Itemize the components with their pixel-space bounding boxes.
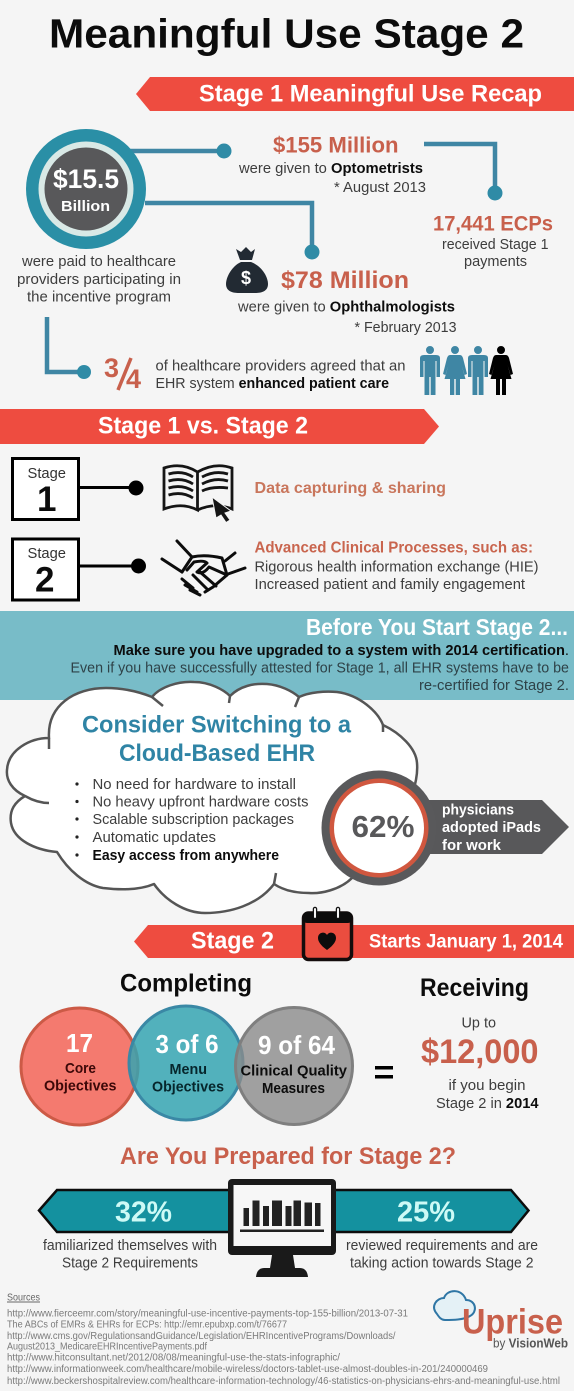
- sources: http://www.fierceemr.com/story/meaningful-use-incentive-payments-top-155-billion/2013-07-31: [7, 1308, 408, 1320]
- stat: three quarters: 4: [126, 364, 141, 394]
- ribbon: 25%: [397, 1196, 455, 1228]
- stat: $78 million ophthalmologists: were given to Ophthalmologists: [237, 300, 455, 316]
- heading: receiving: Receiving: [420, 974, 529, 1002]
- text: familiarized: familiarized themselves with: [43, 1238, 217, 1254]
- icon: handshake: [162, 541, 245, 595]
- text: advanced clinical processes: [254, 540, 538, 593]
- text: familiarized: Stage 2 Requirements: [62, 1256, 198, 1272]
- text: reviewed: reviewed requirements and are: [346, 1238, 538, 1254]
- logo: uprise by visionweb: Uprise: [462, 1302, 563, 1342]
- circle: 17 core objectives: Core: [65, 1060, 96, 1077]
- stat: three quarters: [104, 353, 141, 394]
- banner: stage 1 vs stage 2: Stage 1 vs. Stage 2: [98, 412, 308, 440]
- cloud bullet list: No heavy upfront hardware costs: [92, 794, 308, 810]
- cloud bullet list: [75, 777, 309, 864]
- stat: $155 million optometrists: were given to Optometrists: [238, 161, 423, 177]
- stat: 17,441 ECPs: payments: [464, 254, 527, 270]
- sources: [7, 1292, 560, 1387]
- title: Meaningful Use Stage 2: [49, 10, 524, 56]
- sources: The ABCs of EMRs & EHRs for ECPs: http://emr.epubxp.com/t/76677: [7, 1320, 287, 1330]
- receiving amount: Up to: [462, 1016, 496, 1032]
- text: advanced clinical processes: Increased patient and family engagement: [254, 577, 525, 593]
- text: reviewed: taking action towards Stage 2: [350, 1256, 534, 1272]
- circle: 3 of 6 menu objectives: Objectives: [152, 1078, 224, 1096]
- panel: before you start: Even if you have successfully attested for Stage 1, all EHR systems have to be: [70, 660, 569, 676]
- banner: stage 2 starts: [134, 925, 574, 958]
- sources: http://www.hitconsultant.net/2012/08/08/meaningful-use-the-stats-infographic/: [7, 1352, 340, 1364]
- receiving amount: if you begin: [448, 1078, 526, 1094]
- stat: $155 million optometrists: $155 Million: [273, 132, 398, 158]
- text: providers agreed: EHR system enhanced patient care: [156, 376, 389, 392]
- icon: people: [420, 346, 513, 395]
- sources: http://www.informationweek.com/healthcare/mobile-wireless/doctors-tablet-use-almost-doubles-in-201/240000469: [7, 1364, 488, 1375]
- circle: 3 of 6 menu objectives: [129, 1006, 243, 1120]
- sources: http://www.cms.gov/RegulationsandGuidance/Legislation/EHRIncentivePrograms/Downloads/: [7, 1331, 396, 1342]
- stage 1 box: 1: [37, 480, 56, 519]
- icon: money bag: $: [241, 268, 251, 288]
- receiving amount: [421, 1016, 538, 1112]
- circle: 9 of 64 clinical quality measures: Clinical Quality: [240, 1062, 348, 1080]
- cloud heading: Consider Switching to a: [82, 712, 352, 738]
- cloud heading: Cloud-Based EHR: [119, 740, 315, 767]
- text: advanced clinical processes: Advanced Clinical Processes, such as:: [254, 540, 533, 556]
- ribbon: [39, 1190, 528, 1232]
- cloud bullet list: Easy access from anywhere: [92, 848, 279, 864]
- stat: $78 million ophthalmologists: * February 2013: [354, 320, 456, 336]
- arrow tag: physicians: for work: [442, 838, 502, 854]
- text: familiarized: [43, 1238, 217, 1272]
- circle: 17 core objectives: [21, 1008, 138, 1125]
- cloud bullet list: Scalable subscription packages: [92, 812, 294, 828]
- circle: 3 of 6 menu objectives: Menu: [170, 1061, 207, 1078]
- stat: $155 million optometrists: [238, 132, 426, 196]
- stage 2 connector: [79, 558, 146, 574]
- circle: 3 of 6 menu objectives: 3 of 6: [156, 1029, 218, 1059]
- stage 2 box: Stage: [28, 545, 66, 562]
- panel: before you start: re-certified for Stage 2.: [419, 678, 569, 694]
- stage 1 box: Stage: [28, 465, 66, 482]
- circle: 17 core objectives: 17: [66, 1028, 93, 1058]
- stage 2 box: [12, 539, 78, 600]
- text: paid to providers: [17, 254, 181, 306]
- banner: stage 1 vs stage 2: [0, 409, 439, 444]
- circle: 9 of 64 clinical quality measures: 9 of 64: [258, 1030, 335, 1060]
- cloud bullet list: Automatic updates: [92, 830, 216, 846]
- stat: 17,441 ECPs: received Stage 1: [442, 237, 548, 253]
- stat circle: $15.5 billion: $15.5: [53, 164, 119, 194]
- cloud bullet list: No need for hardware to install: [92, 777, 296, 793]
- arrow tag: physicians: physicians: [442, 802, 514, 818]
- stat: 17,441 ECPs: [433, 212, 553, 270]
- text: reviewed: [346, 1238, 538, 1272]
- connector lines: [47, 144, 495, 372]
- stat: 17,441 ECPs: 17,441 ECPs: [433, 212, 553, 236]
- stat: $78 million ophthalmologists: [237, 267, 456, 336]
- stat circle: 62%: 62%: [352, 809, 414, 844]
- stat: $155 million optometrists: * August 2013: [334, 180, 426, 196]
- arrow tag: physicians: adopted iPads: [442, 820, 541, 836]
- panel: before you start: [0, 611, 574, 700]
- text: providers agreed: of healthcare providers agreed that an: [156, 358, 406, 374]
- cloud: [7, 682, 417, 913]
- ribbon: 32%: [115, 1196, 172, 1228]
- text: advanced clinical processes: Rigorous health information exchange (HIE): [254, 560, 538, 576]
- stat circle: $15.5 billion: [26, 129, 146, 249]
- text: providers agreed: [156, 358, 406, 392]
- icon: book with cursor: [164, 466, 232, 522]
- sources: Sources: [7, 1292, 40, 1304]
- icon: money bag: [226, 247, 268, 293]
- text: paid to providers: providers participating in: [17, 272, 181, 288]
- text: paid to providers: the incentive program: [27, 290, 171, 306]
- logo: uprise by visionweb: [434, 1291, 568, 1350]
- banner: stage 2 starts: Stage 2: [191, 928, 274, 954]
- logo: uprise by visionweb: by VisionWeb: [493, 1336, 568, 1350]
- stat: three quarters: 3: [104, 353, 119, 383]
- text: paid to providers: were paid to healthcare: [21, 254, 176, 270]
- cloud heading: [82, 712, 352, 767]
- bar chart: [240, 1200, 324, 1232]
- sources: http://www.beckershospitalreview.com/healthcare-information-technology/46-statistics-on-physicians-ehrs-and-meaningful-use.html: [7, 1376, 560, 1387]
- banner: stage 1 recap: Stage 1 Meaningful Use Recap: [199, 80, 542, 108]
- connector dots: [77, 144, 502, 379]
- stage 1 connector: [79, 480, 144, 496]
- circle: 9 of 64 clinical quality measures: [236, 1008, 352, 1124]
- stat circle: 62%: [322, 770, 436, 886]
- arrow tag: physicians: [425, 800, 569, 854]
- banner: stage 2 starts: Starts January 1, 2014: [369, 932, 563, 952]
- sources: August2013_MedicareEHRIncentivePayments.pdf: [7, 1342, 207, 1352]
- receiving amount: Stage 2 in 2014: [436, 1096, 538, 1112]
- receiving amount: $12,000: [421, 1033, 538, 1071]
- stat: $78 million ophthalmologists: $78 Million: [281, 267, 409, 294]
- icon: monitor with bar chart: [228, 1179, 336, 1277]
- text: data capturing: Data capturing & sharing: [254, 480, 446, 497]
- heading: are you prepared: Are You Prepared for Stage 2?: [120, 1143, 456, 1170]
- equals sign: [375, 1066, 393, 1078]
- panel: before you start: Make sure you have upgraded to a system with 2014 certification .: [114, 643, 569, 659]
- circle: 9 of 64 clinical quality measures: Measures: [262, 1080, 325, 1097]
- stage 2 box: 2: [35, 560, 54, 600]
- circle: 17 core objectives: Objectives: [44, 1078, 116, 1094]
- stat circle: $15.5 billion: Billion: [61, 198, 110, 215]
- heading: completing: Completing: [120, 970, 252, 998]
- icon: calendar heart: [303, 909, 352, 960]
- stage 1 box: [12, 458, 78, 520]
- banner: stage 1 recap: [136, 77, 574, 111]
